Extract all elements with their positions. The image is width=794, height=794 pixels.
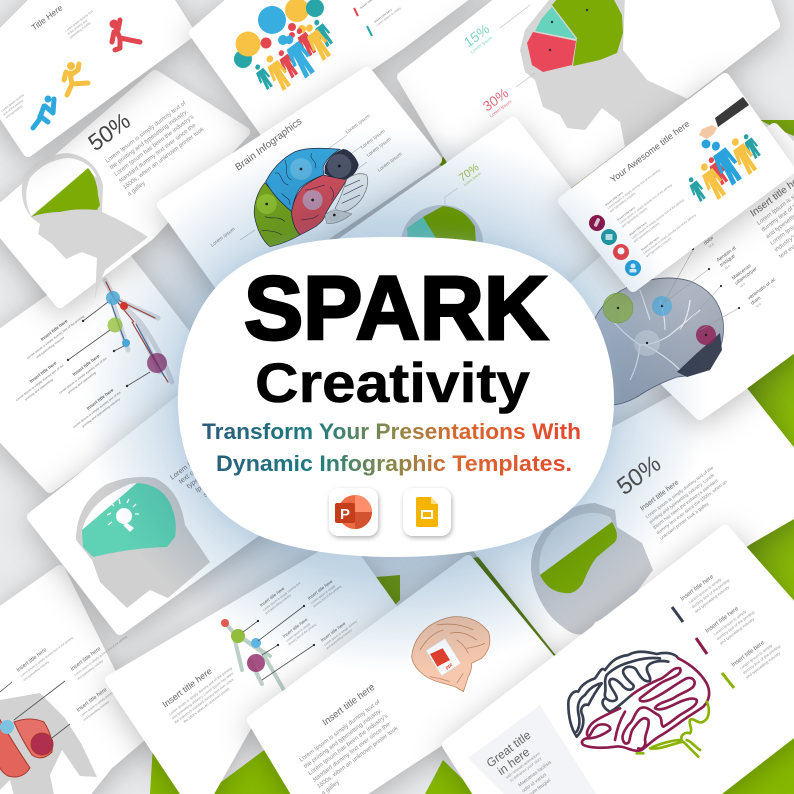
awesome items text: and typesetting industry [645, 236, 673, 258]
bulb text: text of the printing [178, 447, 226, 486]
dark cerebellum [677, 333, 722, 377]
50 percent text: 1500s, when an unknown printer took [122, 127, 205, 191]
great title text: with smooth animations [505, 751, 541, 780]
awesome items text: Lorem Ipsum is simply dummy text of the printing [607, 168, 661, 210]
crowd of people [251, 16, 335, 93]
peach slide paragraph: Lorem Ipsum has been the industry's [308, 713, 389, 777]
people slide legend: Insert title here [373, 8, 393, 24]
grey brain labels: Aenean at [716, 245, 737, 264]
bulb head white area [82, 483, 137, 530]
icon circles [589, 215, 641, 276]
pie chart: red 30 percent [527, 32, 576, 72]
awesome items text: Insert title here [604, 191, 624, 207]
bulb text: Lorem Ipsum is simply [169, 434, 229, 482]
panel: peach brain slide [252, 560, 555, 794]
circulatory text: printing and typesetting [24, 377, 54, 401]
great title text: in here [495, 744, 532, 778]
brain infographic card [162, 72, 437, 300]
lungs callout text: Lorem Ipsum is simply dummy [80, 690, 115, 718]
line brain legend: Lorem Ipsum is simply [688, 577, 722, 605]
icon: powerpoint [329, 488, 378, 536]
grey brain labels: diam [750, 295, 762, 307]
peach slide paragraph: Lorem Ipsum is simply dummy text of [299, 699, 381, 764]
50 percent card [0, 75, 245, 303]
line brain legend: dummy text of the printing [691, 577, 730, 609]
circulatory figure [105, 280, 172, 382]
human item labels: Insert title here [259, 586, 285, 608]
peach slide paragraph [299, 699, 404, 794]
label 70 percent: 70% [457, 161, 481, 184]
lungs callout text: and typesetting industry [22, 659, 50, 682]
panel: grey brain slide [570, 128, 794, 415]
small head teal [407, 217, 437, 242]
circulatory text: Lorem Ipsum is simply dummy text of the [15, 363, 65, 402]
panel: people and speech slide [194, 0, 480, 135]
human figure [225, 623, 285, 692]
label 15 percent: Lorem Ipsum [470, 35, 494, 55]
panel: brain infographics slide [162, 72, 437, 300]
awesome card [563, 78, 790, 287]
human text block: the industry's standard dummy text ever since [174, 678, 234, 725]
text block right: dummy text ever since the 1500s, when an [655, 479, 728, 535]
lungs callout text: Lorem Ipsum is simply dummy text of the printing [20, 635, 74, 678]
panel: line brain slide [447, 530, 794, 794]
panel: head pie chart slide [402, 0, 775, 190]
50 percent text [105, 100, 210, 198]
line brain legend: Insert title here [680, 574, 715, 603]
teal brain [82, 483, 176, 557]
lungs callout lines [0, 681, 70, 738]
50 percent text: the printing and typesetting industry. [109, 109, 189, 171]
great title text: Great title [484, 728, 533, 770]
pie chart: green 55 percent [552, 0, 623, 66]
body silhouette [0, 693, 97, 794]
great title panel [468, 705, 600, 794]
panel: human body slide [110, 542, 395, 794]
bulb text: typesetting industry [186, 448, 238, 490]
human item labels: and typesetting industry [264, 593, 292, 615]
awesome items text: and typesetting industry [621, 206, 649, 228]
running figures text: typesetting industry [69, 20, 92, 39]
lungs callout text: Insert title here [70, 646, 102, 673]
great title text: odio id varius [521, 772, 548, 794]
panel: running figures slide [0, 0, 190, 152]
human item labels: dummy text of the printing [287, 622, 317, 646]
50 percent text: a galley [127, 180, 147, 198]
powerpoint badge in brain: ppt [444, 662, 454, 670]
maroon lobe [582, 658, 709, 751]
blue figure [33, 96, 54, 128]
pie slide card [402, 0, 775, 190]
label 70 percent: Lorem Ipsum [463, 171, 482, 187]
human item labels: Lorem Ipsum is simply dummy text [262, 581, 301, 612]
title SPARK: SPARK [244, 259, 548, 359]
panel: lungs slide [0, 570, 142, 794]
grey brain [592, 278, 724, 406]
brain labels: Lorem Ipsum [366, 136, 392, 159]
peach slide paragraph: the printing and typesetting industry. [303, 708, 383, 770]
small head green [423, 206, 476, 245]
peach slide paragraph: standard dummy text ever since the [312, 721, 392, 784]
line brain legend: and typesetting industry [694, 584, 730, 614]
brain hotspots [257, 154, 351, 221]
green stem [637, 702, 709, 757]
card lower right [453, 371, 794, 650]
bulb text: unknown [218, 486, 244, 508]
circulatory text: Lorem Ipsum is simply dummy text of the [58, 356, 108, 395]
circulatory text: printing and typesetting industry [81, 397, 121, 428]
small head ring [401, 205, 483, 281]
human text block: Insert title here [161, 666, 214, 710]
label 30 percent: 30% [480, 84, 511, 114]
head silhouette [22, 153, 148, 300]
circulatory text: Insert title here [29, 360, 57, 384]
heading your awesome title here: Your Awesome title here [609, 118, 691, 185]
panel: bulb head slide [32, 392, 300, 630]
panel: 70 percent head slide [300, 122, 610, 400]
grey brain labels: venenatis ut ac [747, 277, 777, 302]
awesome items text: Lorem Ipsum is simply dummy text of the printing [643, 213, 697, 255]
brain labels [210, 113, 403, 249]
text block right: Insert title here [639, 479, 680, 513]
great title text [484, 726, 561, 794]
peach slide paragraph: 1500s, when an unknown printer took [316, 726, 399, 790]
heading brain infographics: Brain Infographics [234, 116, 304, 173]
circulatory card [0, 250, 190, 488]
circulatory text: Lorem Ipsum is simply dummy text of the [72, 390, 122, 429]
brain labels: Lorem Ipsum [360, 128, 386, 151]
running figures card [0, 0, 190, 152]
human item labels: dummy text of the printing [312, 584, 342, 608]
circulatory text: and typesetting industry [35, 335, 65, 359]
heading title here: Title Here [30, 2, 65, 33]
human item labels: Insert title here [307, 579, 333, 601]
human text block: the 1500s when an unknown printer [183, 686, 231, 724]
human body card [110, 542, 395, 794]
running figures text: and typesetting [5, 104, 23, 119]
grey brain card [570, 128, 794, 415]
crowd with hand [685, 97, 763, 204]
text block right: printing and typesetting industry. Lorem [648, 472, 715, 525]
line brain legend: Lorem Ipsum is simply [713, 609, 747, 637]
pie chart: teal 15 percent [535, 7, 576, 39]
awesome items text: Insert title here [616, 206, 636, 222]
pie head silhouette [520, 0, 690, 152]
text block right [639, 454, 732, 541]
panel: 50 percent insert title slide [453, 371, 794, 650]
human item labels [259, 576, 360, 650]
running figures text: Lorem Ipsum dummy text [64, 9, 94, 33]
great title text: Maecenas facilisis [517, 759, 553, 789]
awesome items text: Insert title here [640, 236, 660, 252]
bulb text: Ipsum has been [194, 459, 238, 494]
tagline line two: Dynamic Infographic Templates. [216, 451, 572, 476]
text block right: Lorem Ipsum is simply dummy text of the [645, 465, 714, 519]
peach brain [412, 617, 490, 692]
human item labels: Insert title here [320, 621, 346, 643]
grey brain labels: 45.0 [724, 264, 731, 271]
icon: powerpoint: P [340, 506, 350, 523]
line brain legend [672, 567, 784, 688]
bulb card [32, 392, 300, 630]
label 15 percent: 15% [461, 20, 492, 50]
people slide legend [354, 0, 402, 36]
multicolour brain [254, 148, 368, 247]
grey brain hotspots [603, 293, 716, 356]
heading 50 percent: 50% [83, 107, 135, 156]
great title text: to enhance your story [509, 756, 542, 783]
lungs callout text [16, 628, 131, 722]
awesome items text: Lorem Ipsum is simply dummy text of the printing [619, 183, 673, 225]
lungs slide card [0, 570, 142, 794]
panel: 50 percent head slide [0, 75, 245, 303]
bulb text: standard dummy [202, 462, 248, 499]
line brain legend: and typesetting industry [719, 616, 755, 646]
line brain card [447, 530, 794, 794]
peach slide text: Insert title here [321, 682, 377, 728]
brain labels: Lorem Ipsum [210, 226, 236, 249]
navy lobe [568, 652, 678, 737]
circulatory text: Lorem Ipsum is simply dummy text of the printing [26, 314, 85, 360]
running figures text: text of the printing [3, 98, 24, 116]
50 percent text: Lorem Ipsum is simply dummy text of [105, 100, 187, 165]
70 percent card [300, 122, 610, 400]
grey brain labels: dolor [703, 235, 715, 247]
human text block [161, 655, 241, 729]
circulatory text [11, 308, 124, 433]
panel: your awesome title slide [563, 78, 790, 287]
green slide patches [150, 120, 794, 794]
white brain [26, 158, 97, 216]
green brain section [540, 522, 617, 593]
text block right: unknown printer took a galley [659, 500, 710, 541]
grey brain labels [662, 235, 783, 330]
awesome items text: Insert title here [628, 221, 648, 237]
central white blob [178, 237, 614, 557]
grey brain text block [749, 167, 794, 260]
circulatory text: Insert title here [40, 318, 68, 342]
grey brain labels: tristique [719, 253, 737, 269]
grey brain labels: ullamcorper [734, 266, 758, 287]
50 percent text: Lorem Ipsum has been the industry's [114, 114, 195, 178]
awesome items text [604, 164, 699, 258]
human text block: and typesetting industry. Lorem Ipsum has been [171, 671, 234, 720]
human text block: Lorem Ipsum is simply dummy text of the printing [168, 666, 233, 716]
lungs callout text: and typesetting industry [82, 699, 110, 722]
grey brain labels: 54.0 [708, 242, 715, 249]
circulatory markers [67, 291, 167, 387]
50 percent text: standard dummy text ever since the [118, 122, 198, 185]
human item labels: Insert title here [282, 617, 308, 639]
tagline line one: Transform Your Presentations With [202, 419, 581, 444]
grey brain veins [612, 290, 700, 380]
circulatory text: printing and typesetting [67, 370, 97, 394]
label 30 percent: Lorem Ipsum [489, 99, 513, 119]
line brain legend: Insert title here [705, 606, 740, 635]
head ring and silhouette [531, 503, 653, 634]
awesome items text: and typesetting industry [609, 191, 637, 213]
awesome items text: Lorem Ipsum is simply dummy text of the printing [631, 198, 685, 240]
grey brain labels: 55.0 [739, 282, 746, 289]
awesome items text: and typesetting industry [633, 221, 661, 243]
line brain legend: dummy text of the printing [716, 609, 755, 641]
icon: google slides [403, 488, 451, 536]
line brain legend: dummy text of the printing [742, 643, 781, 675]
lungs illustration [0, 716, 53, 777]
line brain legend: and typesetting industry [745, 650, 781, 680]
speech bubbles [234, 0, 324, 68]
grey brain labels: 50.0 [755, 302, 762, 309]
line brain legend: Insert title here [731, 640, 766, 669]
inner white head [539, 513, 612, 575]
human item labels: Lorem Ipsum is simply dummy [323, 619, 358, 647]
human markers [221, 605, 315, 680]
running figures text: of the printing and [67, 18, 88, 36]
label 70 percent leader [445, 188, 458, 207]
red figure [110, 20, 140, 50]
people slide legend: Lorem Ipsum is simply [376, 6, 402, 27]
bulb text [169, 433, 258, 524]
lungs callout text: and typesetting industry [76, 658, 104, 681]
pie markers [500, 5, 588, 87]
panel: central title badge [178, 237, 614, 557]
lungs callout text: Insert title here [16, 647, 48, 674]
heading 50 percent right: 50% [612, 450, 666, 501]
human item labels: and typesetting industry [325, 628, 353, 650]
running figures text: Lorem Ipsum dummy [0, 93, 25, 113]
lungs callout text: Lorem Ipsum is simply dummy text of the printing [74, 634, 128, 677]
line brain legend: Lorem Ipsum is simply [739, 643, 773, 671]
running figures text [0, 9, 98, 119]
bulb head silhouette [76, 477, 210, 608]
yellow figure [64, 62, 88, 95]
green brain fill [31, 168, 100, 217]
panel: circulatory slide [0, 250, 190, 488]
icon: light bulb [107, 499, 139, 532]
circulatory text: Insert title here [86, 387, 114, 411]
grey brain labels: Maecenas [731, 263, 752, 282]
brain labels: Lorem Ipsum [345, 113, 371, 136]
human item labels: Lorem Ipsum is simply [310, 583, 337, 605]
people card [194, 0, 480, 135]
powerpoint badge in brain [426, 638, 461, 676]
title Creativity: Creativity [255, 351, 530, 414]
brain labels: Lorem Ipsum [377, 151, 403, 174]
lungs callout text: Insert title here [76, 687, 108, 714]
human item labels: Lorem Ipsum is simply [285, 621, 312, 643]
line brain [568, 652, 709, 757]
text block right: Ipsum has been the industry's standard [652, 478, 719, 530]
circulatory text: Insert title here [72, 353, 100, 377]
bulb text: since the 1500s [210, 468, 254, 504]
peach brain card [252, 560, 555, 794]
